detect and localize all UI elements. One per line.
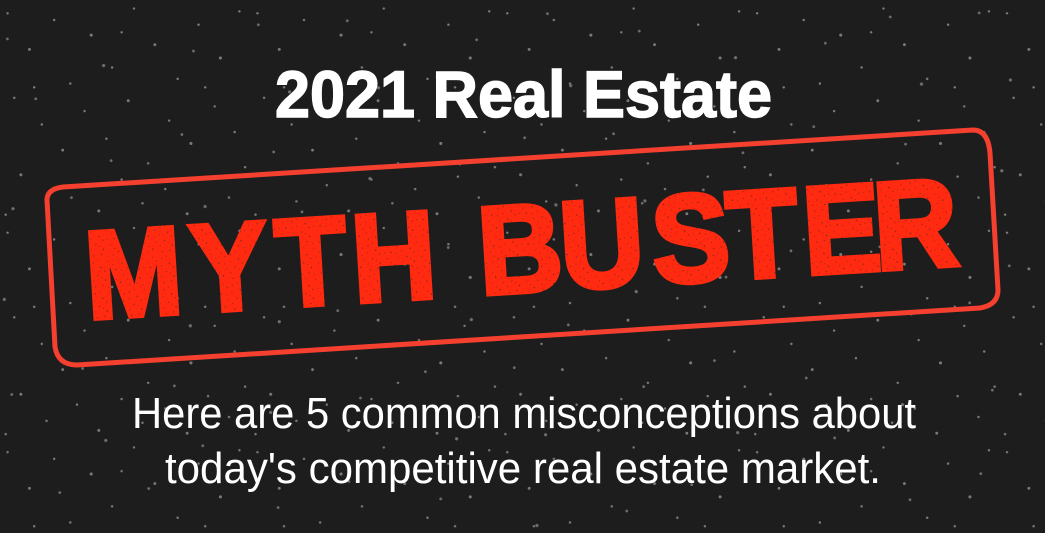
title: 2021 Real Estate: 2021 Real Estate <box>275 57 772 131</box>
stamp text: MYTH BUSTER <box>81 152 962 346</box>
subtitle line 1: Here are 5 common misconceptions about <box>132 389 916 438</box>
subtitle text <box>132 389 916 493</box>
stamp border <box>47 130 998 365</box>
subtitle line 2: today's competitive real estate market. <box>165 444 881 493</box>
